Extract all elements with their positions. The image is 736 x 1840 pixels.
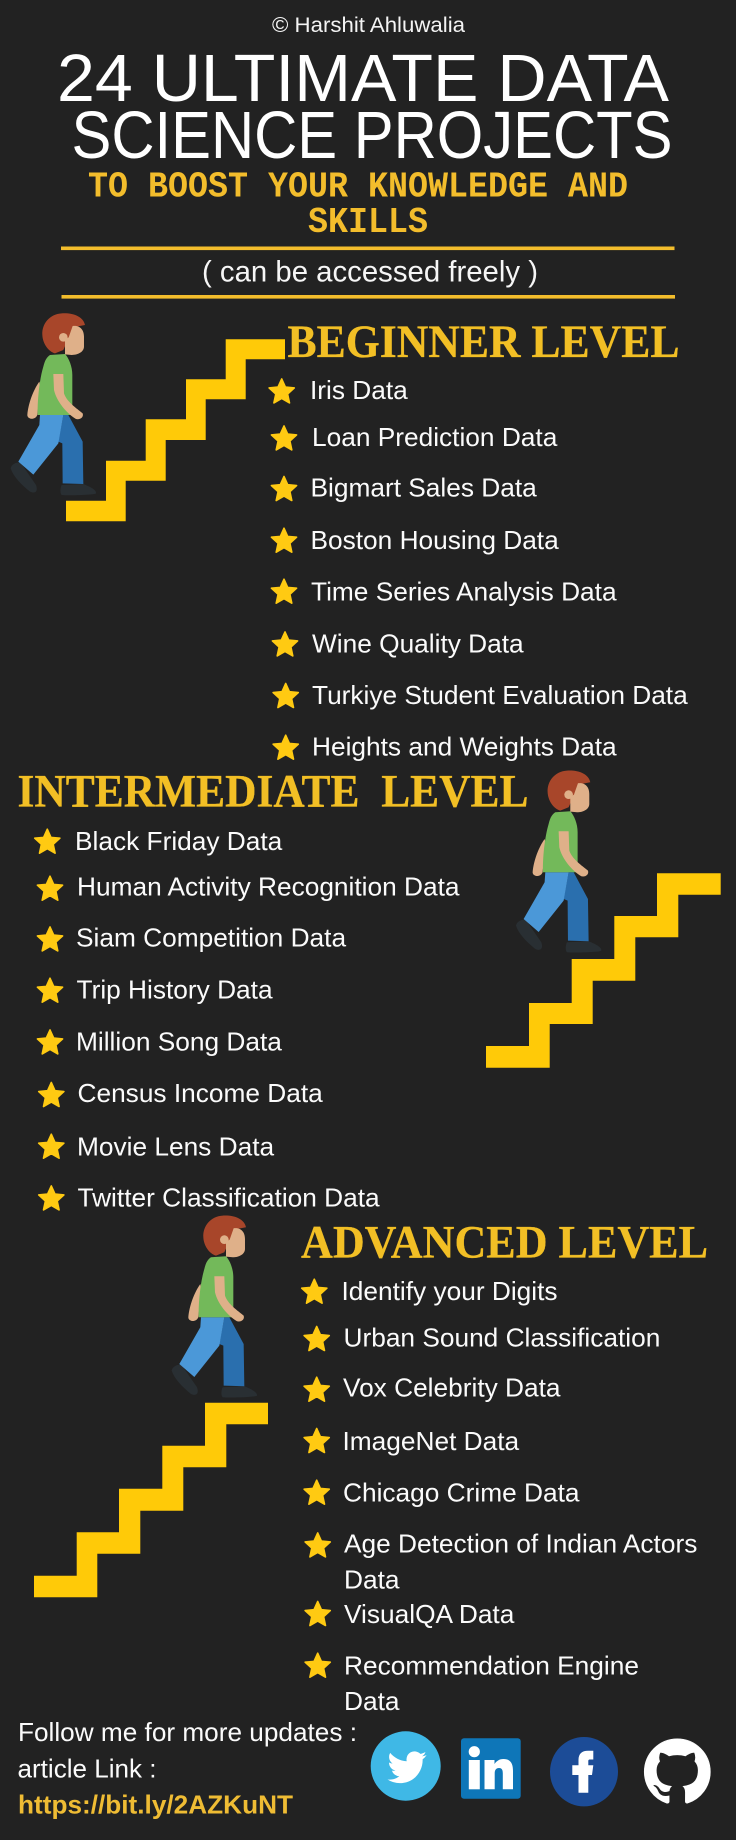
- icon: linkedin: [461, 1738, 521, 1799]
- item: Turkiye Student Evaluation Data: Turkiye Student Evaluation Data: [312, 680, 688, 710]
- item: Iris Data: Iris Data: [310, 375, 408, 405]
- panel: beginner level: [11, 313, 688, 762]
- item: Bigmart Sales Data: Bigmart Sales Data: [310, 473, 537, 503]
- footer text: https://bit.ly/2AZKuNT: [18, 1789, 293, 1819]
- staircase: [486, 873, 721, 1068]
- item: Age Detection of Indian Actors Data: [305, 1529, 697, 1594]
- staircase: [66, 339, 285, 521]
- icon: facebook: [550, 1737, 618, 1806]
- footer text: article Link :: [18, 1753, 156, 1783]
- icon: github: [644, 1739, 710, 1803]
- item: ImageNet Data: ImageNet Data: [342, 1426, 520, 1456]
- item: Identify your Digits: Identify your Digits: [342, 1276, 558, 1306]
- footer text: Follow me for more updates :: [18, 1717, 357, 1747]
- item: Recommendation Engine Data: [305, 1650, 639, 1716]
- item: Census Income Data: Census Income Data: [78, 1078, 323, 1108]
- heading: beginner level: BEGINNER LEVEL: [288, 316, 680, 368]
- item: Urban Sound Classification: Urban Sound Classification: [344, 1323, 660, 1353]
- item: VisualQA Data: VisualQA Data: [344, 1599, 515, 1629]
- item: Recommendation Engine Data: Data: [344, 1686, 400, 1716]
- item: Boston Housing Data: Boston Housing Data: [310, 525, 559, 555]
- credit: © Harshit Ahluwalia: [272, 14, 465, 37]
- item: Movie Lens Data: Movie Lens Data: [77, 1131, 274, 1161]
- panel: intermediate level: [18, 766, 721, 1213]
- item: Million Song Data: Million Song Data: [76, 1027, 282, 1057]
- title: 24 ULTIMATE DATA: [57, 41, 669, 116]
- item: Age Detection of Indian Actors Data: Age Detection of Indian Actors: [344, 1529, 697, 1559]
- item: Heights and Weights Data: Heights and Weights Data: [312, 732, 617, 762]
- footer text: [18, 1717, 357, 1819]
- item: Siam Competition Data: Siam Competition Data: [76, 923, 346, 953]
- heading: advanced level: ADVANCED LEVEL: [301, 1216, 708, 1268]
- icon: walking person: [11, 313, 96, 495]
- item: Chicago Crime Data: Chicago Crime Data: [343, 1478, 580, 1508]
- subtitle: SKILLS: [308, 202, 428, 243]
- item: Recommendation Engine Data: Recommendation Engine: [344, 1650, 639, 1680]
- item: Vox Celebrity Data: Vox Celebrity Data: [343, 1373, 561, 1403]
- item: Wine Quality Data: Wine Quality Data: [312, 628, 524, 658]
- title: SCIENCE PROJECTS: [72, 98, 672, 173]
- item: Trip History Data: Trip History Data: [76, 975, 273, 1005]
- item: Black Friday Data: Black Friday Data: [75, 826, 283, 856]
- subtitle: TO BOOST YOUR KNOWLEDGE AND: [88, 167, 628, 208]
- note: can be accessed freely: ( can be accessed freely ): [202, 256, 538, 288]
- item: Loan Prediction Data: Loan Prediction Data: [312, 422, 558, 452]
- panel: advanced level: [34, 1216, 708, 1716]
- item: Twitter Classification Data: Twitter Classification Data: [78, 1183, 380, 1213]
- staircase: [34, 1403, 268, 1597]
- item: Age Detection of Indian Actors Data: Data: [344, 1564, 400, 1594]
- item: Time Series Analysis Data: Time Series Analysis Data: [311, 576, 617, 606]
- subtitle: [88, 167, 628, 243]
- icon: walking person: [172, 1216, 257, 1398]
- item: Human Activity Recognition Data: Human Activity Recognition Data: [77, 872, 460, 902]
- heading: intermediate level: INTERMEDIATE LEVEL: [18, 766, 528, 818]
- icon: walking person: [516, 771, 601, 953]
- icon: twitter: [371, 1731, 441, 1801]
- title: [57, 41, 672, 173]
